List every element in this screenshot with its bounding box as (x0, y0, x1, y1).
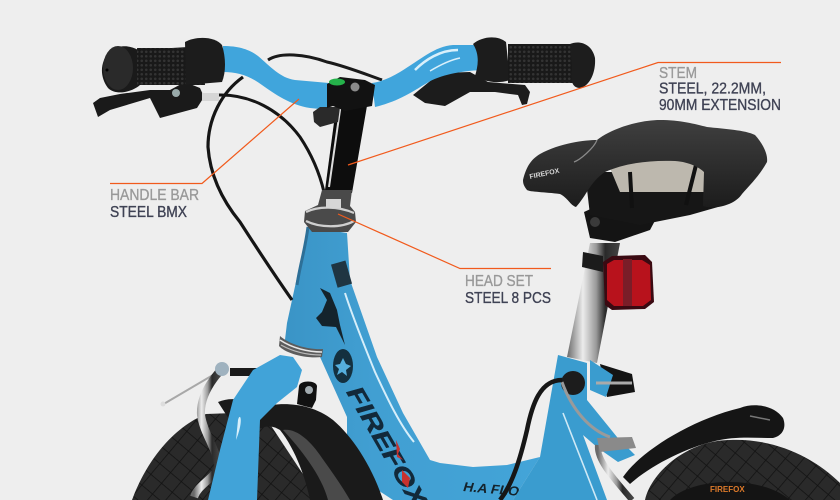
rear reflector (603, 255, 654, 310)
callout: stem (348, 62, 781, 165)
front brake (160, 362, 260, 497)
right brake lever (413, 72, 530, 106)
front wheel (132, 412, 320, 500)
rear wheel: FIREFOX (710, 485, 745, 494)
callout: handle bar: HANDLE BAR (110, 187, 199, 204)
stem clamp (313, 77, 375, 127)
callout: head set: STEEL 8 PCS (465, 290, 551, 307)
rear cable and quick release (500, 360, 635, 500)
left brake lever (93, 82, 219, 118)
fork (208, 355, 317, 500)
frame: main tubes (284, 227, 540, 500)
rear frame stays and seat lug (513, 355, 635, 500)
cable: upper loop (268, 55, 382, 80)
callout: head set (338, 214, 551, 307)
callout: stem: STEEL, 22.2MM, (659, 80, 766, 98)
callout: stem: STEM (659, 65, 697, 82)
saddle: FIREFOX (529, 168, 560, 181)
front fender (218, 399, 383, 500)
stem (325, 100, 368, 193)
right grip (473, 37, 595, 88)
saddle (523, 120, 767, 225)
callout: head set: HEAD SET (465, 273, 533, 290)
callout: handle bar: STEEL BMX (110, 204, 187, 221)
frame decals: H.A FLOA (463, 479, 530, 500)
left grip (102, 38, 225, 92)
seat post (567, 243, 620, 363)
rear wheel (645, 440, 840, 500)
cable: long loop to frame (208, 77, 292, 300)
callout: stem: 90MM EXTENSION (659, 97, 781, 114)
handle bar (223, 45, 483, 110)
head set (304, 190, 356, 232)
lower head set ring (279, 336, 323, 357)
frame decals: FIREFOX (341, 382, 433, 500)
seat clamp bolts (584, 200, 666, 242)
frame decals (316, 261, 530, 500)
cable: lever to stem (218, 95, 324, 192)
rear brake (597, 405, 784, 500)
callout: handle bar (110, 99, 299, 221)
